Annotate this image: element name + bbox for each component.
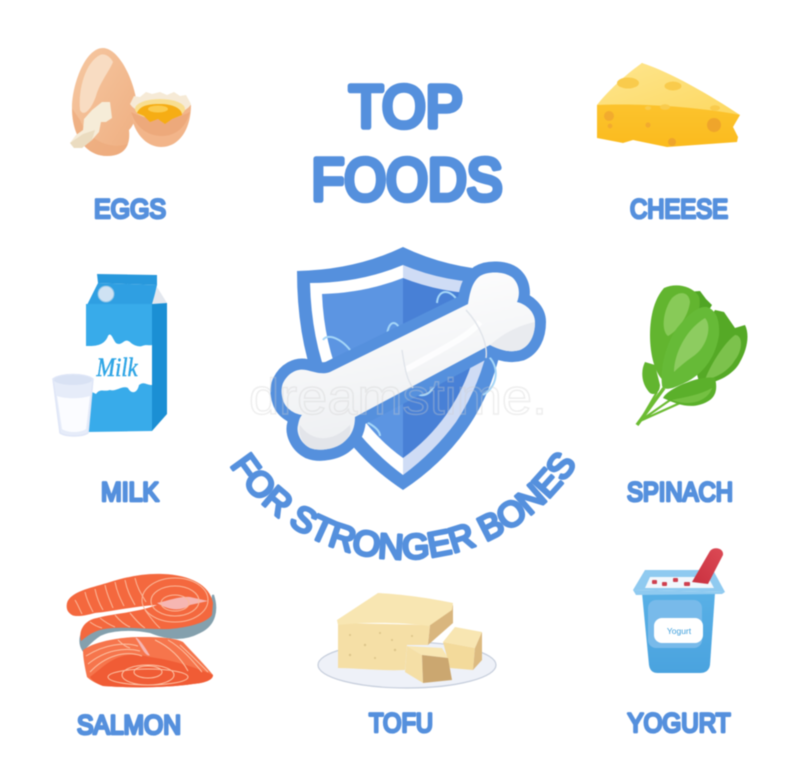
label: spinach: SPINACH xyxy=(627,477,733,507)
curved subtitle: FOR STRONGER BONES xyxy=(229,451,576,562)
title: FOODS xyxy=(312,147,502,213)
panel: tofu xyxy=(318,593,496,738)
label: tofu: TOFU xyxy=(369,708,433,738)
icon: energy rings behind bone xyxy=(323,292,496,436)
panel: yogurt xyxy=(628,548,730,738)
title xyxy=(312,74,502,213)
icon: eggs xyxy=(70,48,191,156)
icon: yogurt cup: Yogurt xyxy=(667,626,692,636)
icon: milk carton xyxy=(86,274,167,432)
panel: spinach xyxy=(627,285,747,507)
label: yogurt: YOGURT xyxy=(628,708,730,738)
watermark: dreamstime. xyxy=(249,369,547,425)
label: milk: MILK xyxy=(101,477,159,507)
title: TOP xyxy=(349,74,463,140)
label: eggs: EGGS xyxy=(94,194,166,224)
label: cheese: CHEESE xyxy=(630,194,728,224)
icon: shield xyxy=(297,247,509,490)
icon: spinach xyxy=(637,285,747,425)
icon: plate xyxy=(318,642,496,688)
icon: salmon fillet xyxy=(83,637,213,687)
panel: cheese xyxy=(597,63,740,224)
icon: cheese xyxy=(597,63,740,147)
icon: glass of milk xyxy=(53,374,93,436)
icon: salmon steak xyxy=(67,574,215,650)
icon: energy rings over bone xyxy=(402,310,486,388)
panel: milk xyxy=(53,274,167,507)
panel: salmon xyxy=(67,574,215,740)
icon: bone xyxy=(282,272,535,450)
icon: tofu blocks xyxy=(337,593,482,683)
label: salmon: SALMON xyxy=(77,710,181,740)
panel: eggs xyxy=(70,48,191,224)
icon: yogurt cup xyxy=(633,548,725,673)
panel: center emblem xyxy=(229,246,576,562)
icon: milk carton: Milk xyxy=(96,353,138,382)
